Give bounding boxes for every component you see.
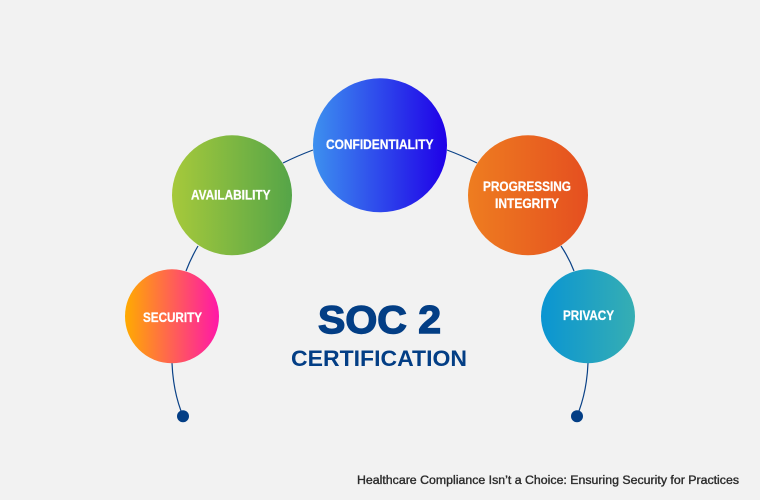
subtitle: CERTIFICATION: [291, 346, 467, 371]
circle: availability: [172, 135, 292, 255]
circle: progressing integrity: INTEGRITY: [495, 196, 559, 211]
circle: security: SECURITY: [143, 310, 202, 325]
footer caption: Healthcare Compliance Isn’t a Choice: Ensuring Security for Practices: [357, 475, 739, 487]
circle: progressing integrity: [468, 135, 588, 255]
circle: confidentiality: [313, 78, 447, 212]
right end dot: [571, 410, 583, 422]
connector arc: [172, 150, 588, 411]
circle: privacy: PRIVACY: [563, 308, 614, 323]
circle: privacy: [541, 269, 635, 363]
title: SOC 2: [318, 299, 441, 342]
circle: confidentiality: CONFIDENTIALITY: [326, 137, 434, 152]
circle: availability: AVAILABILITY: [191, 188, 270, 202]
circle: progressing integrity: PROGRESSING: [483, 179, 571, 194]
left end dot: [177, 410, 189, 422]
circle: security: [125, 269, 219, 363]
